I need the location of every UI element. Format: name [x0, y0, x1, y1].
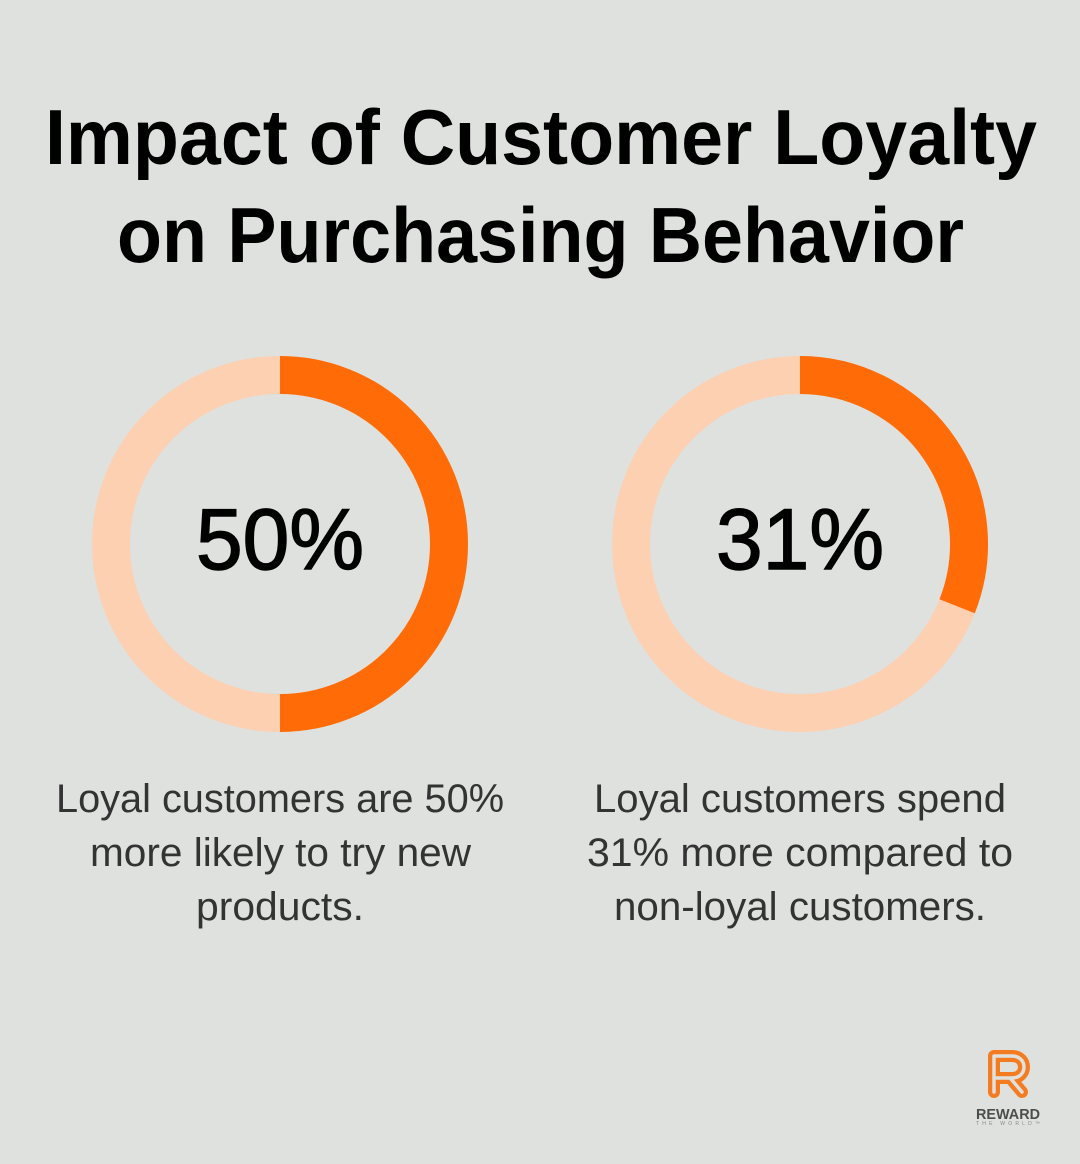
title: Impact of Customer Loyalty — [45, 93, 1037, 181]
caption: 31%: Loyal customers spend — [594, 777, 1006, 821]
caption: 50%: more likely to try new — [90, 831, 471, 875]
donut chart: 31%: 31% — [716, 492, 884, 588]
caption: 50%: Loyal customers are 50% — [56, 777, 504, 821]
logo: Reward the World: REWARD — [976, 1106, 1040, 1123]
donut chart: 31% — [631, 375, 969, 713]
caption: 50% — [56, 777, 504, 929]
logo: Reward the World: THE WORLD™ — [976, 1121, 1040, 1127]
caption: 31%: 31% more compared to — [587, 831, 1013, 875]
logo: Reward the World — [976, 1056, 1040, 1127]
caption: 50%: products. — [196, 885, 364, 929]
icon: R mark — [994, 1056, 1024, 1092]
caption: 31%: non-loyal customers. — [614, 885, 986, 929]
caption: 31% — [587, 777, 1013, 929]
donut chart: 50%: 50% — [196, 492, 364, 588]
title — [45, 93, 1037, 279]
title: on Purchasing Behavior — [117, 191, 964, 279]
donut chart: 50% — [111, 375, 449, 713]
